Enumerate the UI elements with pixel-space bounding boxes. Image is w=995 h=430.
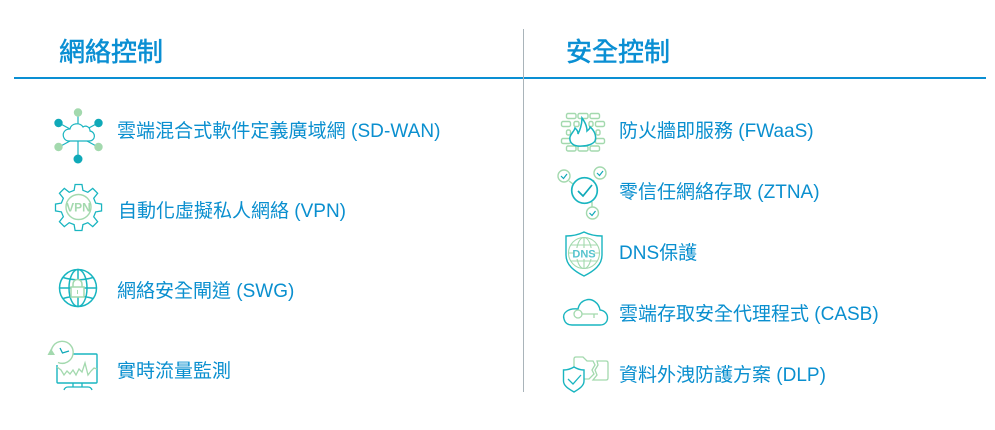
label: DLP: 資料外洩防護方案 (DLP) [619, 365, 826, 386]
icon: CASB cloud key [562, 298, 608, 326]
label: DNS protection: DNS保護 [619, 243, 697, 264]
label: ZTNA: 零信任網絡存取 (ZTNA) [619, 182, 820, 203]
icon: DLP shield and broken folder [562, 356, 609, 393]
label: SD-WAN: 雲端混合式軟件定義廣域網 (SD-WAN) [117, 121, 441, 142]
heading: network controls: 網絡控制 [59, 37, 163, 67]
icon: VPN gear: VPN [66, 200, 91, 214]
label: VPN: 自動化虛擬私人網絡 (VPN) [118, 201, 346, 222]
icon: DNS shield: DNS [572, 248, 596, 260]
label: FWaaS: 防火牆即服務 (FWaaS) [619, 121, 814, 142]
label: SWG: 網絡安全閘道 (SWG) [117, 281, 294, 302]
icon: secure web gateway globe [58, 268, 98, 308]
icon: DNS shield [565, 231, 603, 277]
icon: firewall flame [560, 112, 606, 152]
icon: SD-WAN cloud network [54, 108, 103, 164]
label: real-time monitoring: 實時流量監測 [117, 361, 231, 382]
icon: real-time monitoring [48, 340, 98, 390]
icon: VPN gear [54, 184, 102, 232]
label: CASB: 雲端存取安全代理程式 (CASB) [619, 304, 879, 325]
heading: security controls: 安全控制 [566, 37, 670, 67]
icon: zero trust network [557, 166, 607, 220]
